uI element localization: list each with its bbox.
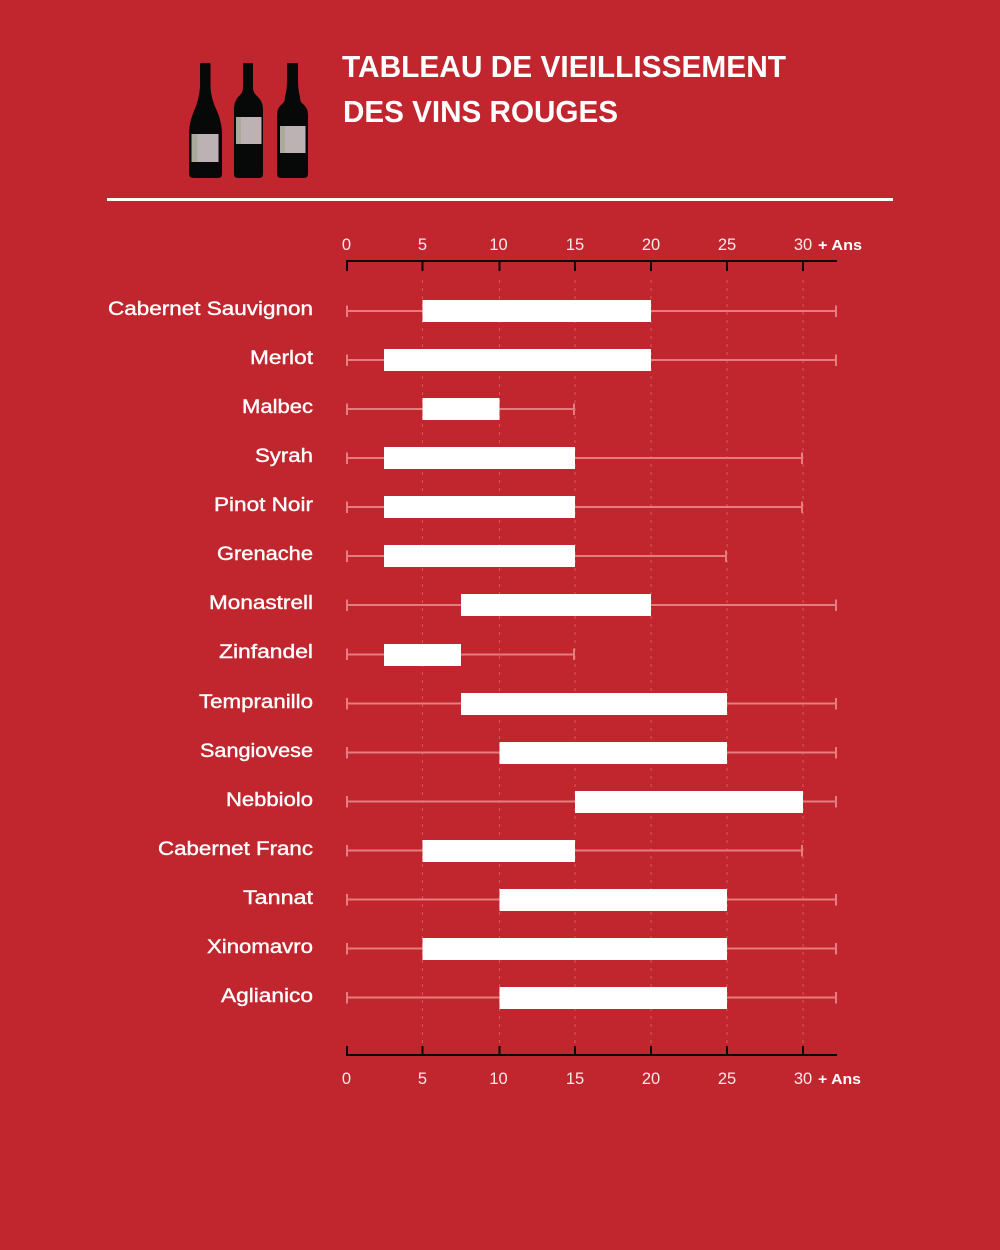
row: Monastrell bbox=[209, 592, 836, 616]
top axis: 10 bbox=[489, 236, 508, 254]
top axis: 15 bbox=[566, 236, 584, 254]
row: Malbec: Malbec bbox=[242, 396, 313, 418]
bottom axis: 30 bbox=[794, 1070, 812, 1088]
row: Sangiovese: Sangiovese bbox=[200, 740, 313, 762]
row: Zinfandel: Zinfandel bbox=[219, 641, 313, 663]
row: Malbec bbox=[242, 396, 574, 420]
row: Aglianico: Aglianico bbox=[221, 985, 313, 1007]
bottom axis: + Ans bbox=[818, 1071, 861, 1088]
row: Merlot bbox=[250, 347, 836, 371]
row: Grenache bbox=[217, 543, 726, 567]
row: Pinot Noir bbox=[214, 494, 802, 518]
top axis: 20 bbox=[642, 236, 660, 254]
top axis: 25 bbox=[718, 236, 736, 254]
icon: three wine bottles bbox=[189, 63, 308, 178]
row: Tempranillo bbox=[199, 691, 836, 715]
bottom axis: 15 bbox=[566, 1070, 584, 1088]
row: Tempranillo: Tempranillo bbox=[199, 691, 313, 713]
row: Merlot: Merlot bbox=[250, 347, 314, 369]
row: Cabernet Sauvignon: Cabernet Sauvignon bbox=[108, 298, 313, 320]
icon: bottle 3 bbox=[277, 63, 308, 178]
top axis: 5 bbox=[418, 236, 427, 254]
row: Syrah bbox=[255, 445, 802, 469]
top axis: + Ans bbox=[818, 237, 862, 254]
row: Nebbiolo: Nebbiolo bbox=[226, 789, 313, 811]
bottom axis: 25 bbox=[718, 1070, 736, 1088]
row: Cabernet Sauvignon bbox=[108, 298, 836, 322]
bottom axis: 5 bbox=[418, 1070, 427, 1088]
title: DES VINS ROUGES bbox=[343, 94, 618, 129]
row: Monastrell: Monastrell bbox=[209, 592, 313, 614]
row: Aglianico bbox=[221, 985, 836, 1009]
bottom axis: 20 bbox=[642, 1070, 660, 1088]
title bbox=[342, 49, 786, 129]
row: Cabernet Franc bbox=[158, 838, 802, 862]
row: Xinomavro: Xinomavro bbox=[207, 936, 313, 958]
row: Syrah: Syrah bbox=[255, 445, 313, 467]
icon: bottle 2 bbox=[234, 63, 263, 178]
top axis: 0 bbox=[342, 236, 351, 254]
row: Nebbiolo bbox=[226, 789, 836, 813]
row: Tannat: Tannat bbox=[243, 887, 314, 909]
row: Grenache: Grenache bbox=[217, 543, 313, 565]
icon: bottle 1 bbox=[189, 63, 222, 178]
row: Pinot Noir: Pinot Noir bbox=[214, 494, 314, 516]
row: Cabernet Franc: Cabernet Franc bbox=[158, 838, 313, 860]
bottom axis: 0 bbox=[342, 1070, 351, 1088]
top axis bbox=[342, 236, 862, 271]
row: Tannat bbox=[243, 887, 836, 911]
title: TABLEAU DE VIEILLISSEMENT bbox=[342, 49, 786, 84]
row: Xinomavro bbox=[207, 936, 836, 960]
bottom axis bbox=[342, 1046, 861, 1088]
top axis: 30 bbox=[794, 236, 812, 254]
bottom axis: 10 bbox=[489, 1070, 508, 1088]
row: Sangiovese bbox=[200, 740, 836, 764]
row: Zinfandel bbox=[219, 641, 574, 666]
